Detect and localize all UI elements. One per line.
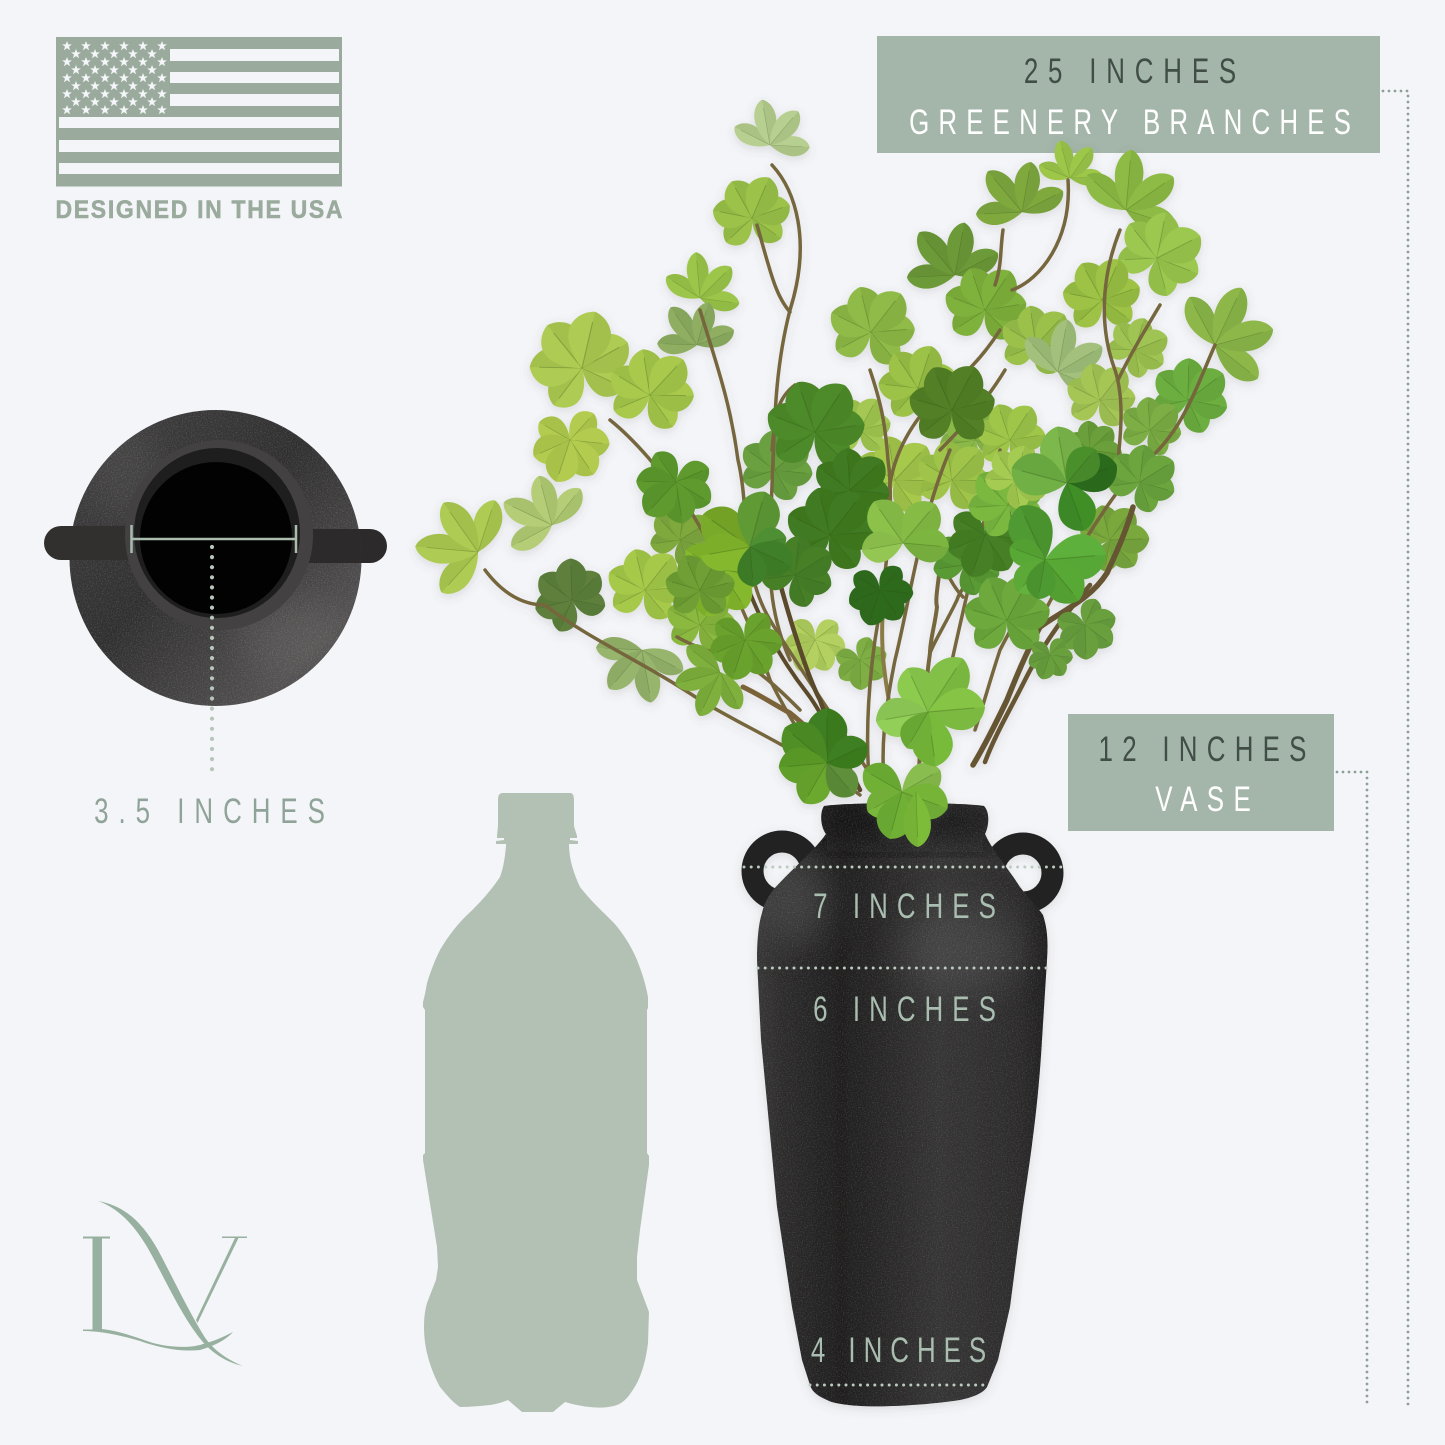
- sprig: left mid: [691, 486, 799, 588]
- text: designed in the USA: DESIGNED IN THE USA: [56, 196, 342, 224]
- label: vase: VASE: [1155, 779, 1251, 819]
- vase body: [750, 800, 1055, 1410]
- greenery branches: [395, 90, 1299, 847]
- label: 7 inches: 7 INCHES: [813, 886, 996, 926]
- label: 12 inches: 12 INCHES: [1099, 729, 1306, 769]
- back leaves: [395, 90, 1299, 714]
- dotted line: handle width: [744, 866, 1062, 868]
- label: 25 inches: 25 INCHES: [1024, 51, 1236, 91]
- label: 4 inches: 4 INCHES: [811, 1330, 986, 1370]
- icon: American flag badge: [56, 37, 342, 186]
- left handle: [61, 526, 128, 560]
- dense mid foliage: [623, 359, 1193, 736]
- rim: [125, 440, 313, 630]
- panel: 12 inches vase: [1068, 714, 1334, 831]
- stems: [485, 165, 1215, 795]
- sprig: bright centre: [859, 491, 951, 565]
- sprig: dark lower left: [772, 708, 874, 812]
- rim inner shadow: [134, 448, 300, 618]
- icon: vase top view: [60, 405, 370, 715]
- right handle: [305, 529, 370, 563]
- sprig: bright foreground: [873, 647, 987, 769]
- label: 6 inches: 6 INCHES: [813, 989, 996, 1029]
- logo: LV monogram: [83, 1201, 247, 1366]
- dotted line: 25 inch height: [1383, 91, 1408, 1408]
- left handle: [752, 842, 812, 900]
- right handle: [994, 844, 1052, 902]
- vase body from above: [70, 410, 362, 706]
- sprig: lower bud cluster: [856, 756, 954, 847]
- dimension line: opening width: [132, 525, 296, 772]
- sprig: right bright green: [1000, 497, 1108, 613]
- opening: [140, 462, 292, 614]
- label: greenery branches: GREENERY BRANCHES: [909, 102, 1351, 142]
- bottle silhouette: [423, 793, 649, 1412]
- dotted line: base width: [810, 1384, 988, 1386]
- black vase: [750, 800, 1055, 1410]
- dotted line: 12 inch height: [1337, 772, 1367, 1408]
- label: 3.5 inches: 3.5 INCHES: [94, 791, 325, 831]
- sprig: upper right big: [1006, 423, 1123, 537]
- dotted line: body width: [758, 966, 1048, 970]
- panel: 25 inches greenery branches: [877, 36, 1380, 153]
